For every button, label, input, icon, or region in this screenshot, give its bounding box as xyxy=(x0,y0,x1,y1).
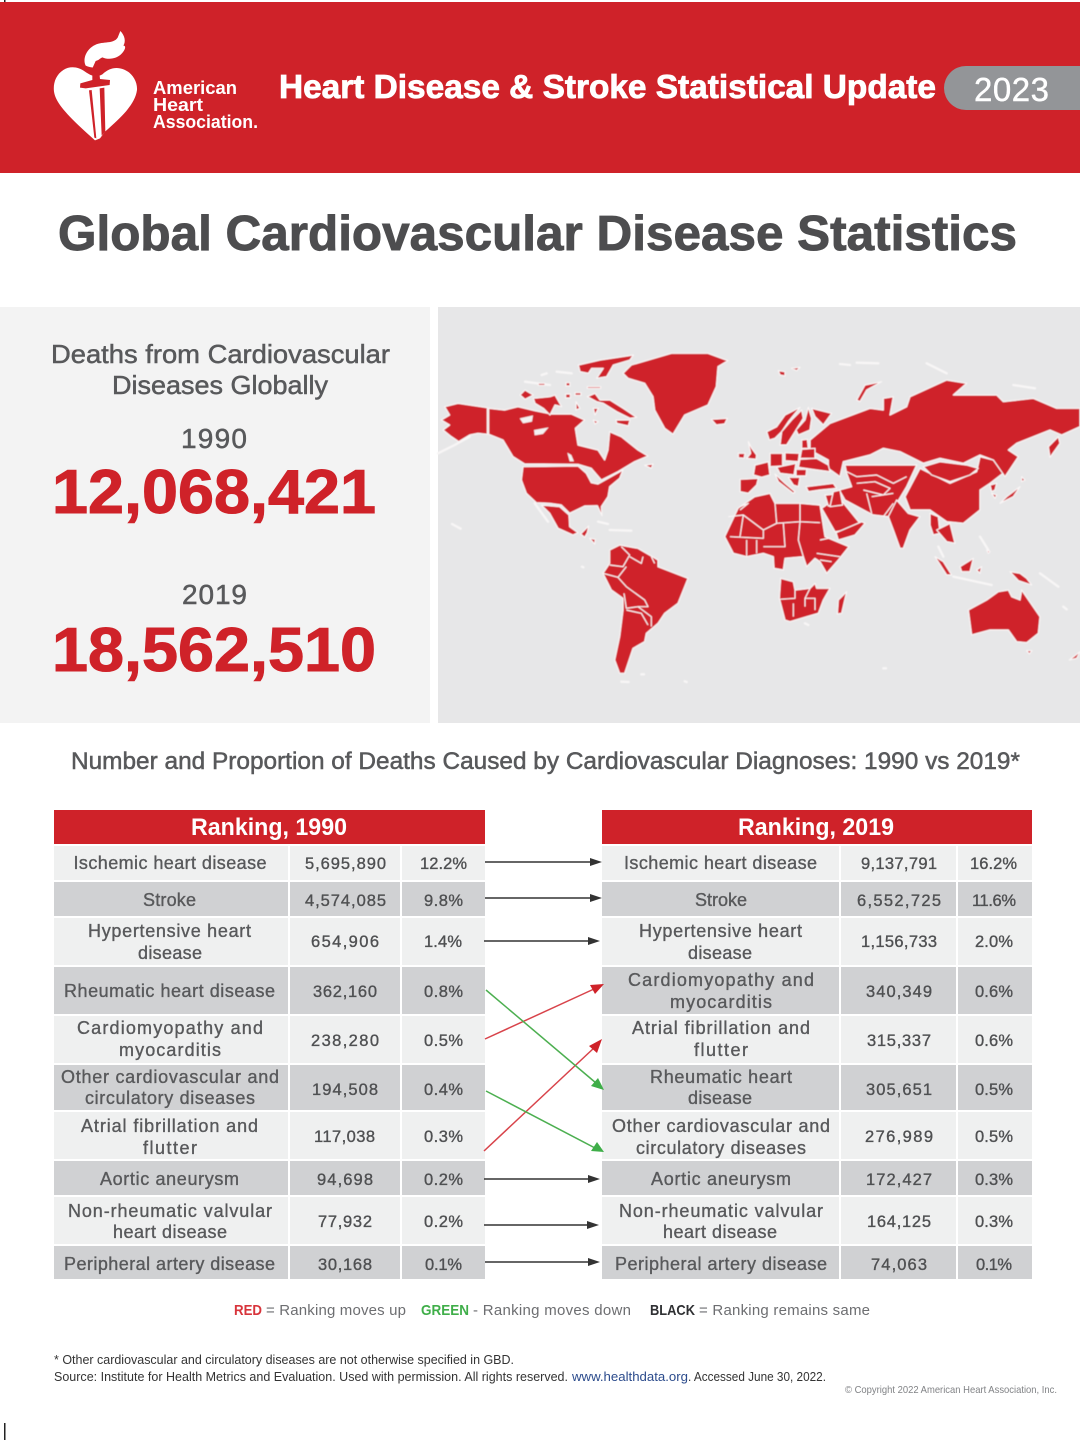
map: Americas xyxy=(438,353,728,682)
row: Aortic aneurysm 2019 xyxy=(602,1161,1032,1195)
row: Rheumatic heart disease 2019: 305,651 xyxy=(866,1081,932,1099)
section heading: Number and Proportion of Deaths Caused by Cardiovascular Diagnoses: 1990 vs 2019* xyxy=(71,748,1020,775)
legend: - Ranking moves down xyxy=(473,1302,631,1319)
2019 deaths stat xyxy=(52,579,376,685)
row: Hypertensive heart disease 1990: disease xyxy=(138,943,202,963)
row: Rheumatic heart disease 2019 xyxy=(602,1065,1032,1110)
page title: Global Cardiovascular Disease Statistics xyxy=(58,207,1017,261)
row: Cardiomyopathy and myocarditis 1990: 238,280 xyxy=(311,1032,379,1050)
row: Stroke 1990: 9.8% xyxy=(424,892,463,910)
map: Europe xyxy=(738,407,843,507)
arrows between rankings xyxy=(484,858,604,1266)
footnotes and source: * Other cardiovascular and circulatory diseases are not otherwise specified in GBD. xyxy=(54,1352,514,1367)
row: Ischemic heart disease 1990: 12.2% xyxy=(420,855,467,873)
icon: American Heart Association heart and torch logo xyxy=(54,31,137,140)
legend xyxy=(234,1302,870,1319)
row: Non-rheumatic valvular 1990: Non-rheumatic valvular xyxy=(68,1201,272,1221)
row: Other cardiovascular 1990: circulatory diseases xyxy=(85,1088,255,1108)
arrow: Other cardiovascular moves down xyxy=(486,1091,604,1152)
row: Non-rheumatic valvular 1990: 77,932 xyxy=(318,1213,372,1231)
panel: global deaths xyxy=(0,307,430,723)
arrow: Rheumatic moves down xyxy=(486,990,604,1090)
legend: GREEN xyxy=(421,1302,469,1319)
row: Non-rheumatic valvular 2019: 164,125 xyxy=(867,1213,931,1231)
row: Peripheral artery disease 1990: 0.1% xyxy=(425,1256,462,1274)
row: Hypertensive heart disease 1990: 654,906 xyxy=(311,933,379,951)
row: Aortic aneurysm 1990: Aortic aneurysm xyxy=(100,1169,239,1189)
copyright: © Copyright 2022 American Heart Association, Inc. xyxy=(845,1384,1057,1396)
row: Aortic aneurysm 2019: Aortic aneurysm xyxy=(651,1169,791,1189)
logo wordmark: Heart xyxy=(153,95,203,115)
logo wordmark: American xyxy=(153,78,237,98)
row: Aortic aneurysm 1990: 0.2% xyxy=(424,1171,463,1189)
row: Cardiomyopathy and myocarditis 2019: 0.6% xyxy=(975,983,1013,1001)
row: Atrial fibrillation 2019: Atrial fibrillation and xyxy=(632,1018,810,1038)
row: Hypertensive heart disease 1990 xyxy=(54,918,485,965)
row: Peripheral artery disease 1990: 30,168 xyxy=(318,1256,372,1274)
arrow: Cardiomyopathy moves up xyxy=(485,984,604,1039)
panel heading: Diseases Globally xyxy=(112,370,328,400)
row: Non-rheumatic valvular 1990: 0.2% xyxy=(424,1213,463,1231)
row: Other cardiovascular 2019: 0.5% xyxy=(975,1128,1013,1146)
arrow: Peripheral unchanged xyxy=(485,1258,600,1266)
arrow: Ischemic unchanged xyxy=(485,858,602,866)
1990 deaths stat: 1990 xyxy=(181,423,247,454)
row: Rheumatic heart disease 2019: Rheumatic heart xyxy=(650,1067,792,1087)
row: Aortic aneurysm 1990: 94,698 xyxy=(317,1171,373,1189)
row: Hypertensive heart disease 2019: disease xyxy=(688,943,752,963)
row: Peripheral artery disease 2019: 74,063 xyxy=(871,1256,927,1274)
legend: BLACK xyxy=(650,1302,695,1319)
row: Rheumatic heart disease 2019: disease xyxy=(688,1088,752,1108)
arrow: Hypertensive unchanged xyxy=(484,937,600,945)
table: ranking 2019 xyxy=(602,810,1032,1279)
row: Other cardiovascular 2019: 276,989 xyxy=(865,1128,933,1146)
row: Cardiomyopathy and myocarditis 2019: myocarditis xyxy=(670,992,772,1012)
year pill: 2023 xyxy=(974,71,1049,108)
arrow: Aortic unchanged xyxy=(484,1175,600,1183)
row: Other cardiovascular 2019 xyxy=(602,1112,1032,1159)
1990 deaths stat: 12,068,421 xyxy=(52,458,376,527)
row: Rheumatic heart disease 1990 xyxy=(54,967,485,1014)
row: Non-rheumatic valvular 2019: heart disease xyxy=(663,1222,777,1242)
row: Other cardiovascular 1990: Other cardiovascular and xyxy=(61,1067,279,1087)
row: Ischemic heart disease 1990: Ischemic heart disease xyxy=(74,853,266,873)
footnotes and source: . Accessed June 30, 2022. xyxy=(688,1369,826,1384)
row: Rheumatic heart disease 1990: Rheumatic heart disease xyxy=(64,981,275,1001)
row: Hypertensive heart disease 2019: 1,156,733 xyxy=(861,933,937,951)
row: Hypertensive heart disease 2019 xyxy=(602,918,1032,965)
row: Non-rheumatic valvular 2019: 0.3% xyxy=(975,1213,1013,1231)
row: Aortic aneurysm 2019: 172,427 xyxy=(866,1171,932,1189)
row: Rheumatic heart disease 2019: 0.5% xyxy=(975,1081,1013,1099)
row: Stroke 1990: Stroke xyxy=(143,890,196,910)
row: Cardiomyopathy and myocarditis 1990: myocarditis xyxy=(119,1040,221,1060)
logo wordmark xyxy=(153,78,258,132)
row: Cardiomyopathy and myocarditis 2019: 340,349 xyxy=(866,983,932,1001)
2019 deaths stat: 18,562,510 xyxy=(52,616,376,685)
footnotes and source: Source: Institute for Health Metrics and Evaluation. Used with permission. All rights reserved. xyxy=(54,1369,568,1384)
row: Other cardiovascular 2019: circulatory diseases xyxy=(636,1138,806,1158)
row: Peripheral artery disease 1990 xyxy=(54,1246,485,1279)
row: Rheumatic heart disease 1990: 362,160 xyxy=(313,983,377,1001)
year pill xyxy=(944,66,1080,110)
table header 2019 xyxy=(602,810,1032,844)
table: ranking 1990 xyxy=(54,810,485,1279)
row: Cardiomyopathy and myocarditis 2019: Cardiomyopathy and xyxy=(628,970,814,990)
row: Ischemic heart disease 2019: Ischemic heart disease xyxy=(624,853,817,873)
row: Cardiomyopathy and myocarditis 1990: Cardiomyopathy and xyxy=(77,1018,263,1038)
logo wordmark: Association. xyxy=(153,112,258,132)
row: Atrial fibrillation 2019: flutter xyxy=(694,1040,748,1060)
row: Stroke 2019: Stroke xyxy=(695,890,747,910)
row: Atrial fibrillation 2019: 315,337 xyxy=(867,1032,931,1050)
row: Peripheral artery disease 2019 xyxy=(602,1246,1032,1279)
header banner xyxy=(0,2,1080,173)
row: Ischemic heart disease 1990: 5,695,890 xyxy=(305,855,386,873)
legend: = Ranking remains same xyxy=(699,1302,870,1319)
row: Atrial fibrillation 1990 xyxy=(54,1112,485,1159)
row: Cardiomyopathy and myocarditis 1990: 0.5% xyxy=(424,1032,463,1050)
table header 1990 xyxy=(54,810,485,844)
row: Other cardiovascular 1990: 0.4% xyxy=(424,1081,463,1099)
row: Other cardiovascular 2019: Other cardiovascular and xyxy=(612,1116,830,1136)
row: Atrial fibrillation 2019: 0.6% xyxy=(975,1032,1013,1050)
row: Hypertensive heart disease 1990: 1.4% xyxy=(424,933,462,951)
row: Non-rheumatic valvular 1990: heart disease xyxy=(113,1222,227,1242)
row: Rheumatic heart disease 1990: 0.8% xyxy=(424,983,463,1001)
row: Peripheral artery disease 2019: Peripheral artery disease xyxy=(615,1254,827,1274)
row: Hypertensive heart disease 2019: 2.0% xyxy=(975,933,1013,951)
2019 deaths stat: 2019 xyxy=(182,579,247,610)
panel heading xyxy=(51,339,390,400)
panel: world map xyxy=(438,307,1080,723)
arrow: Non-rheumatic unchanged xyxy=(484,1221,599,1229)
arrow: Stroke unchanged xyxy=(485,894,602,902)
footnotes and source xyxy=(54,1352,826,1384)
row: Other cardiovascular 1990: 194,508 xyxy=(312,1081,378,1099)
arrow: Atrial fibrillation moves up xyxy=(484,1039,602,1151)
row: Ischemic heart disease 2019: 9,137,791 xyxy=(861,855,937,873)
footnotes and source: www.healthdata.org xyxy=(571,1369,688,1384)
map: Canadian Arctic islands xyxy=(520,355,637,426)
row: Atrial fibrillation 1990: Atrial fibrillation and xyxy=(81,1116,258,1136)
row: Other cardiovascular 1990 xyxy=(54,1065,485,1110)
row: Hypertensive heart disease 2019: Hypertensive heart xyxy=(639,921,802,941)
table header 2019: Ranking, 2019 xyxy=(738,814,894,841)
1990 deaths stat xyxy=(52,423,376,527)
row: Stroke 1990 xyxy=(54,882,485,916)
row: Non-rheumatic valvular 2019 xyxy=(602,1197,1032,1244)
row: Cardiomyopathy and myocarditis 2019 xyxy=(602,967,1032,1014)
row: Cardiomyopathy and myocarditis 1990 xyxy=(54,1016,485,1063)
row: Non-rheumatic valvular 2019: Non-rheumatic valvular xyxy=(619,1201,823,1221)
legend: = Ranking moves up xyxy=(266,1302,406,1319)
row: Peripheral artery disease 2019: 0.1% xyxy=(976,1256,1012,1274)
row: Aortic aneurysm 1990 xyxy=(54,1161,485,1195)
legend: RED xyxy=(234,1302,262,1319)
row: Atrial fibrillation 1990: 117,038 xyxy=(314,1128,375,1146)
row: Aortic aneurysm 2019: 0.3% xyxy=(975,1171,1013,1189)
map: Africa, Asia and Oceania xyxy=(725,363,1080,668)
row: Non-rheumatic valvular 1990 xyxy=(54,1197,485,1244)
row: Atrial fibrillation 1990: flutter xyxy=(143,1138,197,1158)
row: Ischemic heart disease 2019: 16.2% xyxy=(970,855,1017,873)
row: Ischemic heart disease 2019 xyxy=(602,846,1032,880)
banner title: Heart Disease & Stroke Statistical Update xyxy=(279,68,936,105)
row: Stroke 2019: 6,552,725 xyxy=(857,892,941,910)
row: Stroke 2019: 11.6% xyxy=(972,892,1016,910)
table header 1990: Ranking, 1990 xyxy=(191,814,347,841)
row: Stroke 2019 xyxy=(602,882,1032,916)
row: Atrial fibrillation 2019 xyxy=(602,1016,1032,1063)
row: Ischemic heart disease 1990 xyxy=(54,846,485,880)
row: Stroke 1990: 4,574,085 xyxy=(305,892,386,910)
row: Atrial fibrillation 1990: 0.3% xyxy=(424,1128,463,1146)
panel heading: Deaths from Cardiovascular xyxy=(51,339,390,369)
row: Hypertensive heart disease 1990: Hypertensive heart xyxy=(88,921,251,941)
row: Peripheral artery disease 1990: Peripheral artery disease xyxy=(64,1254,275,1274)
